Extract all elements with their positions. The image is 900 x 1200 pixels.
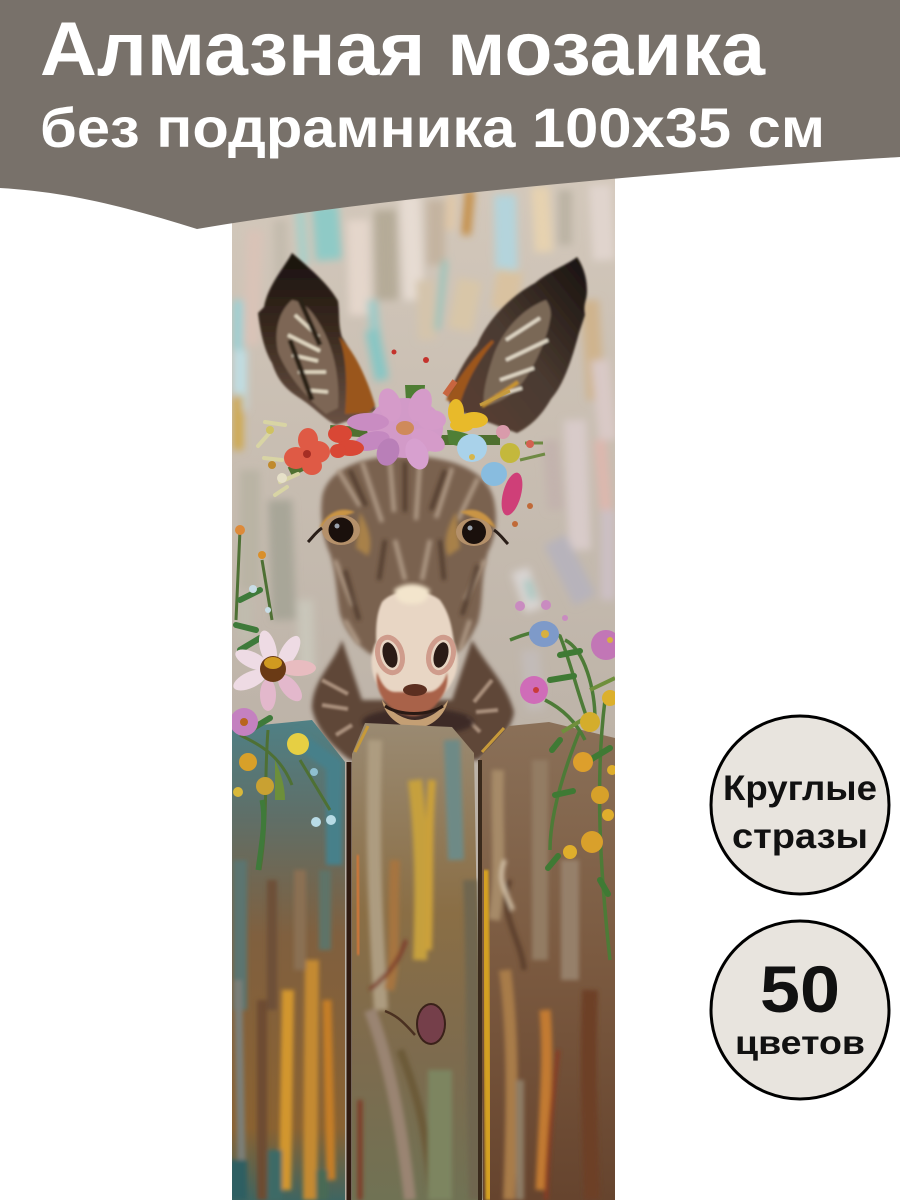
pink side flower <box>502 472 522 516</box>
header banner <box>0 0 900 229</box>
painted background strokes <box>238 185 608 710</box>
head <box>319 456 496 654</box>
flower crown <box>258 350 545 527</box>
fence <box>232 720 615 1200</box>
plank gaps <box>346 762 352 1200</box>
title: Алмазная мозаика <box>40 7 766 92</box>
right ear <box>446 257 587 433</box>
pink flower <box>347 385 449 473</box>
center plank <box>352 723 482 1200</box>
red flowers <box>284 428 330 475</box>
title <box>40 7 825 159</box>
painting: donkey with flower crown behind a wooden fence <box>230 170 621 1200</box>
neck and mane <box>312 640 514 760</box>
badge: round rhinestones: Круглые <box>723 769 877 808</box>
small sprigs <box>500 443 520 463</box>
yellow flower <box>448 399 488 432</box>
right plank <box>479 722 615 1200</box>
badge: round rhinestones <box>711 716 889 894</box>
badge: round rhinestones: стразы <box>732 817 868 856</box>
badge: 50 colours: цветов <box>735 1024 865 1061</box>
badge: 50 colours: 50 <box>760 952 840 1026</box>
blue flowers <box>457 434 487 462</box>
muzzle <box>372 584 458 728</box>
right wildflowers <box>510 600 621 960</box>
fence knot <box>416 1003 446 1045</box>
eyes <box>308 515 508 546</box>
leaves under yellow <box>447 430 468 446</box>
left ear <box>258 253 376 425</box>
badge: 50 colours <box>711 921 889 1099</box>
left plank <box>232 720 345 1200</box>
left wildflowers <box>230 525 336 870</box>
subtitle: без подрамника 100х35 см <box>40 96 825 159</box>
